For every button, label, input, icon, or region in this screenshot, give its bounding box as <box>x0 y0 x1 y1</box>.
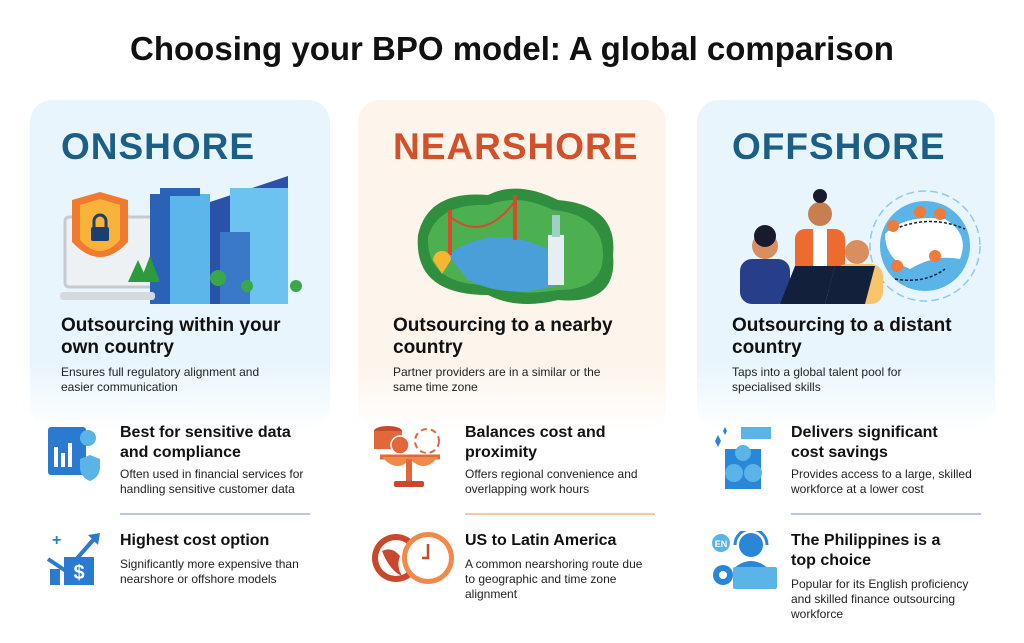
icon: cost growth: $ <box>73 562 85 584</box>
text: Highest cost option <box>120 532 269 549</box>
text: US to Latin America <box>465 532 616 549</box>
bullet: highest cost <box>46 532 299 586</box>
panel: nearshore <box>358 100 666 430</box>
illustration: buildings <box>60 176 302 304</box>
text <box>465 532 642 601</box>
illustration: team and globe <box>740 189 981 304</box>
heading: onshore: ONSHORE <box>61 126 255 167</box>
text: A common nearshoring route due to geographic and time zone alignment <box>465 557 642 601</box>
text <box>120 424 304 496</box>
text: onshore heading: Outsourcing within your own country <box>61 315 281 358</box>
panel: onshore <box>30 100 330 430</box>
heading: nearshore: NEARSHORE <box>393 126 638 167</box>
text: Popular for its English proficiency and skilled finance outsourcing workforce <box>791 577 968 621</box>
icon: globe and clock <box>372 532 454 584</box>
text: Delivers significant cost savings <box>791 424 938 461</box>
icon: agent with EN: EN <box>715 539 727 549</box>
text: Provides access to a large, skilled workforce at a lower cost <box>791 467 972 496</box>
text: Often used in financial services for handling sensitive customer data <box>120 467 303 496</box>
text <box>791 532 968 621</box>
icon: document chart <box>48 427 100 481</box>
bullet: US to Latin America <box>372 532 642 601</box>
icon: agent with EN <box>712 531 777 589</box>
text: Best for sensitive data and compliance <box>120 424 291 461</box>
text: nearshore desc: Partner providers are in a similar or the same time zone <box>393 365 600 394</box>
icon: cost growth: + <box>52 532 61 549</box>
bullet: Philippines <box>712 531 968 621</box>
text <box>120 532 299 586</box>
text: Offers regional convenience and overlapping work hours <box>465 467 638 496</box>
icon: scale with coins <box>374 426 440 487</box>
heading: offshore: OFFSHORE <box>732 126 946 167</box>
text: offshore desc: Taps into a global talent pool for specialised skills <box>732 365 901 394</box>
text: offshore heading: Outsourcing to a distant country <box>732 315 952 358</box>
text <box>465 424 638 496</box>
text <box>791 424 972 496</box>
text: onshore desc: Ensures full regulatory alignment and easier communication <box>61 365 259 394</box>
text: Significantly more expensive than nearshore or offshore models <box>120 557 299 586</box>
icon: money jar <box>715 427 771 489</box>
bullet: sensitive data <box>48 424 304 496</box>
text: The Philippines is a top choice <box>791 532 940 569</box>
text: nearshore heading: Outsourcing to a nearby country <box>393 315 613 358</box>
bullet: balances cost <box>374 424 638 496</box>
title: Choosing your BPO model: A global comparison <box>130 30 894 67</box>
panel: offshore <box>697 100 995 430</box>
icon: cost growth <box>46 532 100 585</box>
text: Balances cost and proximity <box>465 424 606 461</box>
illustration: map <box>418 188 614 304</box>
bullet: cost savings <box>715 424 972 496</box>
